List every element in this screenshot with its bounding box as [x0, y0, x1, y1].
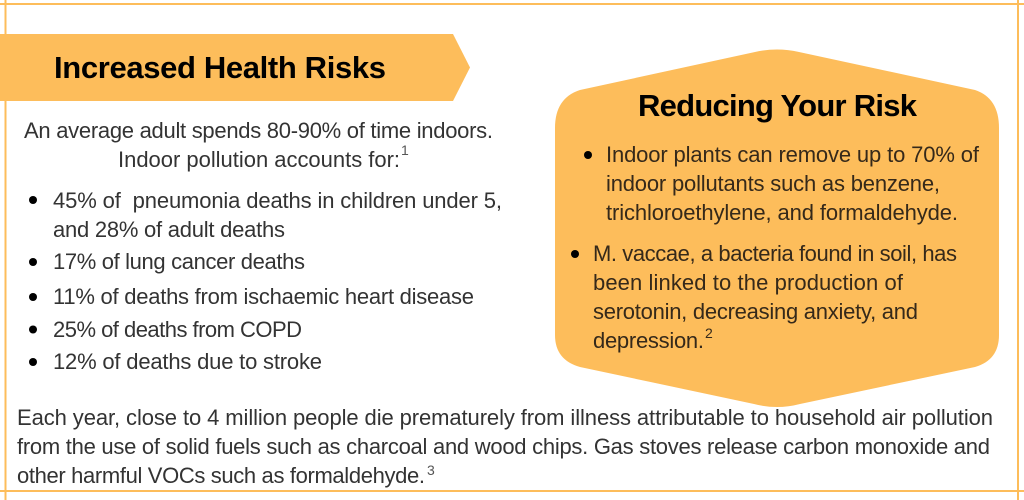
panel: Reducing Your Risk [555, 50, 999, 407]
intro text: Indoor pollution accounts for: [118, 147, 400, 172]
bottom paragraph: other harmful VOCs such as formaldehyde. [17, 463, 425, 488]
bullet: indoor plants: indoor pollutants such as benzene, [606, 171, 940, 196]
bullet: indoor plants: trichloroethylene, and formaldehyde. [606, 200, 958, 225]
bullet list: indoor pollution deaths: 25% of deaths from COPD [53, 317, 302, 342]
intro text: 1 [401, 142, 409, 158]
bullet: M. vaccae: M. vaccae, a bacteria found in soil, has [593, 241, 957, 266]
bullet: M. vaccae: serotonin, decreasing anxiety, and [593, 299, 918, 324]
bullet: indoor plants: Indoor plants can remove up to 70% of [606, 142, 980, 167]
bullet list: indoor pollution deaths: 11% of deaths from ischaemic heart disease [53, 284, 474, 309]
heading banner: Increased Health Risks [0, 34, 470, 101]
bullet: indoor plants [584, 142, 980, 225]
bullet: M. vaccae: depression. [593, 328, 704, 353]
bullet list: indoor pollution deaths: 17% of lung cancer deaths [53, 249, 305, 274]
bottom paragraph: Each year, close to 4 million people die prematurely from illness attributable to household air pollution [17, 405, 993, 430]
bottom paragraph: 3 [427, 462, 435, 478]
bullet list: indoor pollution deaths [29, 188, 502, 374]
bullet: M. vaccae [571, 241, 957, 353]
panel background shape [555, 50, 999, 407]
intro text [24, 118, 493, 172]
bullet: M. vaccae: been linked to the production of [593, 270, 904, 295]
bullet: M. vaccae: 2 [705, 325, 713, 341]
heading banner: Increased Health Risks: Increased Health Risks [54, 50, 386, 85]
bullet list: indoor pollution deaths: 45% of pneumonia deaths in children under 5, [53, 188, 502, 213]
bullet list: indoor pollution deaths: and 28% of adult deaths [53, 217, 285, 242]
bullet list: indoor pollution deaths: 12% of deaths due to stroke [53, 349, 322, 374]
bottom paragraph [17, 405, 993, 488]
intro text: An average adult spends 80-90% of time indoors. [24, 118, 493, 143]
panel heading: Reducing Your Risk [638, 88, 918, 123]
bottom paragraph: from the use of solid fuels such as charcoal and wood chips. Gas stoves release carbon monoxide and [17, 434, 990, 459]
